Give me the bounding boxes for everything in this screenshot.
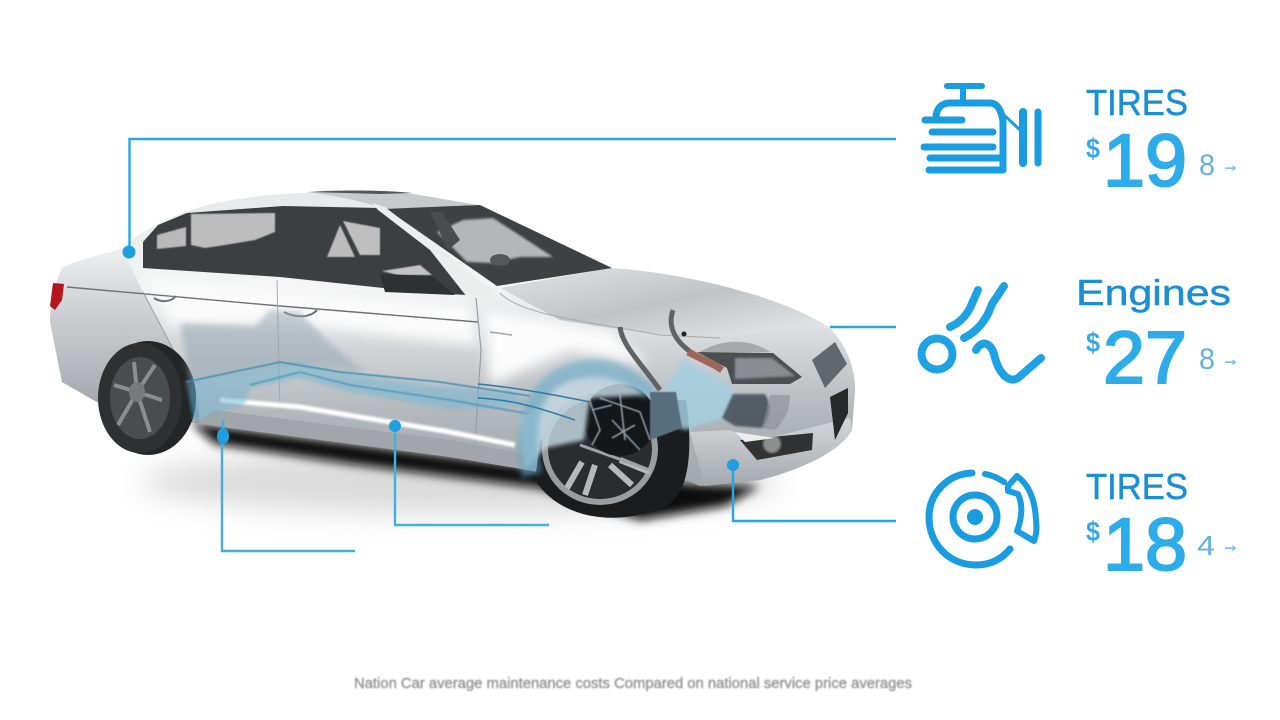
footer note: Nation Car average maintenance costs Compared on national service price averages xyxy=(354,675,912,692)
car illustration xyxy=(50,190,855,520)
front wheel arch blue overlay xyxy=(478,359,658,478)
front wheel rim xyxy=(542,384,658,505)
icon: engine xyxy=(924,86,1038,170)
price: 19: $ xyxy=(1086,133,1100,164)
price: 18: 4 xyxy=(1197,530,1215,561)
upper grille xyxy=(812,342,847,388)
callout line: front bumper xyxy=(727,459,896,521)
windshield xyxy=(385,205,612,286)
label: engines: Engines xyxy=(1076,272,1231,313)
price: 27: $ xyxy=(1086,327,1100,358)
headlight xyxy=(697,342,802,384)
front fender highlight xyxy=(484,310,650,385)
icon: brake disc xyxy=(929,473,1036,565)
car body xyxy=(50,192,855,486)
door seams and lines xyxy=(67,280,720,442)
a pillar xyxy=(372,203,498,300)
label: tires top: TIRES xyxy=(1086,82,1188,123)
price: 18 xyxy=(1086,503,1239,586)
hood xyxy=(500,268,830,336)
front tyre xyxy=(535,400,689,518)
callout line: hood xyxy=(830,326,896,328)
lower grille xyxy=(830,388,848,440)
price: 19: 8 xyxy=(1199,149,1215,182)
price: 27: 27 xyxy=(1103,316,1187,399)
price: 19 xyxy=(1086,119,1239,202)
engine wires xyxy=(620,310,722,390)
label: tires bottom: TIRES xyxy=(1086,466,1188,507)
tail light xyxy=(50,283,64,310)
roof xyxy=(307,190,478,209)
lower sill xyxy=(193,410,540,472)
side windows xyxy=(143,206,467,295)
rear blue chassis overlay xyxy=(180,310,530,422)
engine blue overlay xyxy=(650,358,790,440)
price: 18: → xyxy=(1222,536,1239,555)
price: 18: 18 xyxy=(1103,503,1187,586)
rear quarter xyxy=(50,248,193,423)
icon: hoses xyxy=(922,286,1041,380)
price: 19: → xyxy=(1222,156,1239,175)
callout line: door sill xyxy=(389,420,549,525)
fog lamp xyxy=(735,432,813,460)
callout line: top xyxy=(122,139,896,258)
sill highlight xyxy=(220,400,515,445)
callout line: rear sill xyxy=(217,420,355,551)
price: 27: → xyxy=(1222,350,1239,369)
ground shadow xyxy=(140,422,780,520)
price: 27: 8 xyxy=(1199,343,1215,376)
rear wheel xyxy=(98,341,196,455)
bumper xyxy=(690,418,852,486)
price: 27 xyxy=(1086,316,1239,399)
price: 18: $ xyxy=(1086,516,1100,547)
price: 19: 19 xyxy=(1103,119,1187,202)
white door highlight xyxy=(150,280,478,345)
